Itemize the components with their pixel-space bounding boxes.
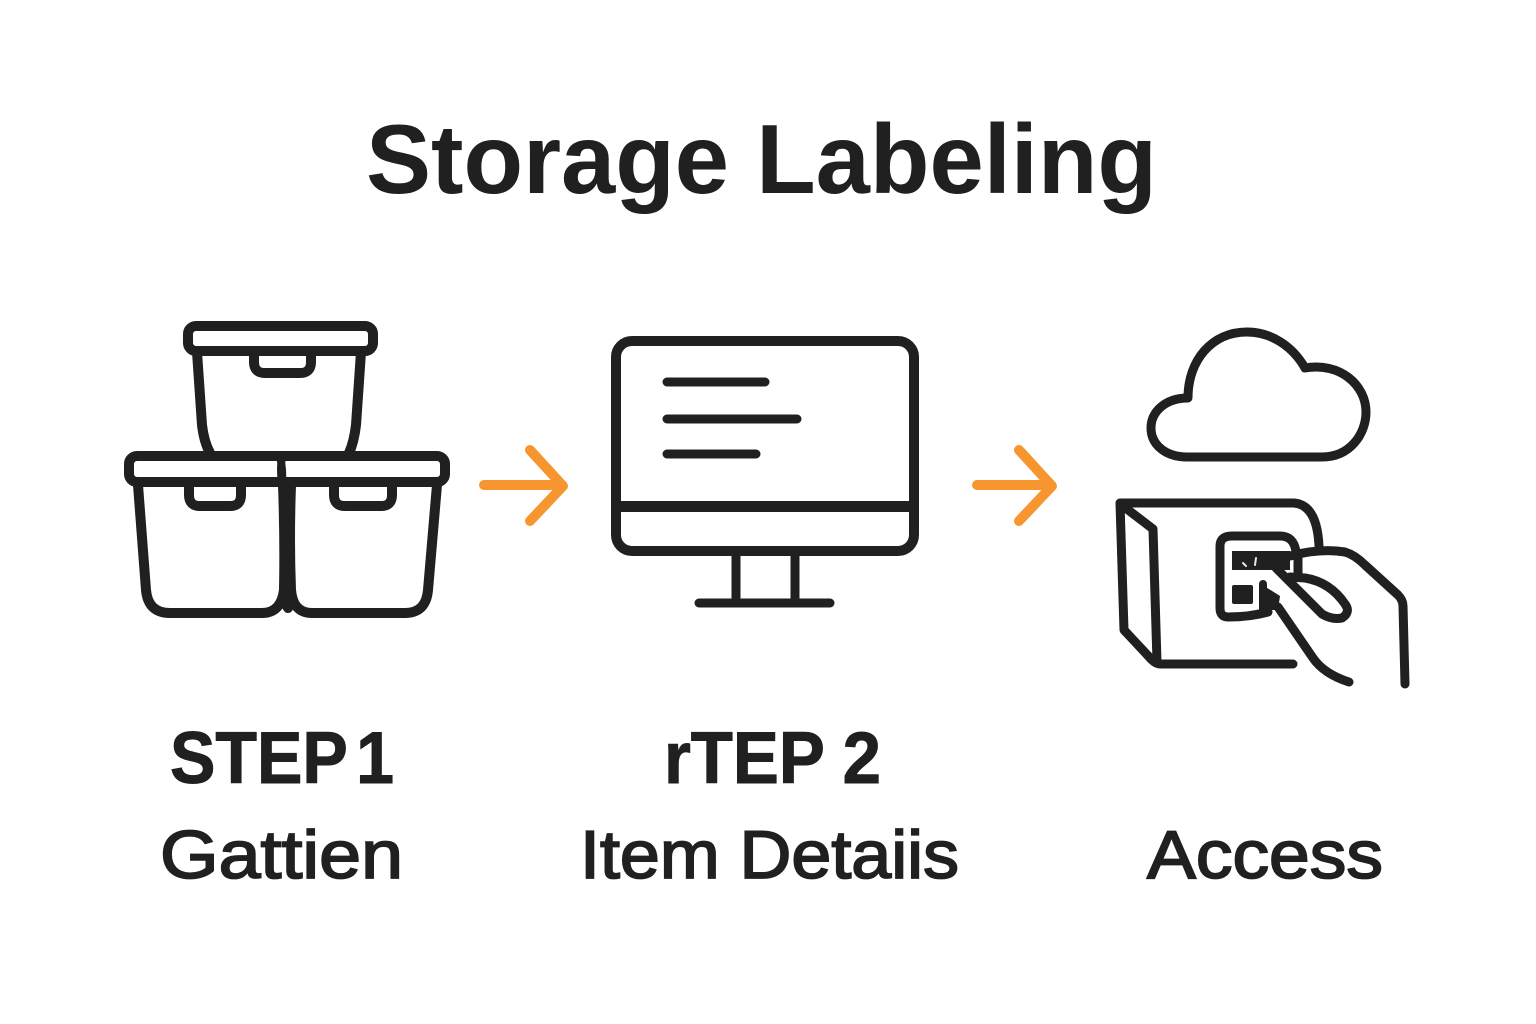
step 3 label: Access [1147, 817, 1383, 893]
icon: cloud [1151, 332, 1366, 457]
arrow: step 1 to step 2 [484, 450, 563, 521]
icon: computer monitor [616, 341, 914, 603]
step 2 label: Item Detaiis [580, 817, 959, 893]
step 1 label: Gattien [160, 817, 403, 893]
title: Storage Labeling [366, 104, 1157, 214]
icon: stacked storage containers [129, 326, 445, 613]
step 1 heading: STEP 1 [170, 718, 394, 799]
arrow: step 2 to step 3 [977, 450, 1052, 521]
step 2 heading: rTEP 2 [664, 718, 881, 799]
icon: hand scanning label on box [1120, 503, 1405, 684]
